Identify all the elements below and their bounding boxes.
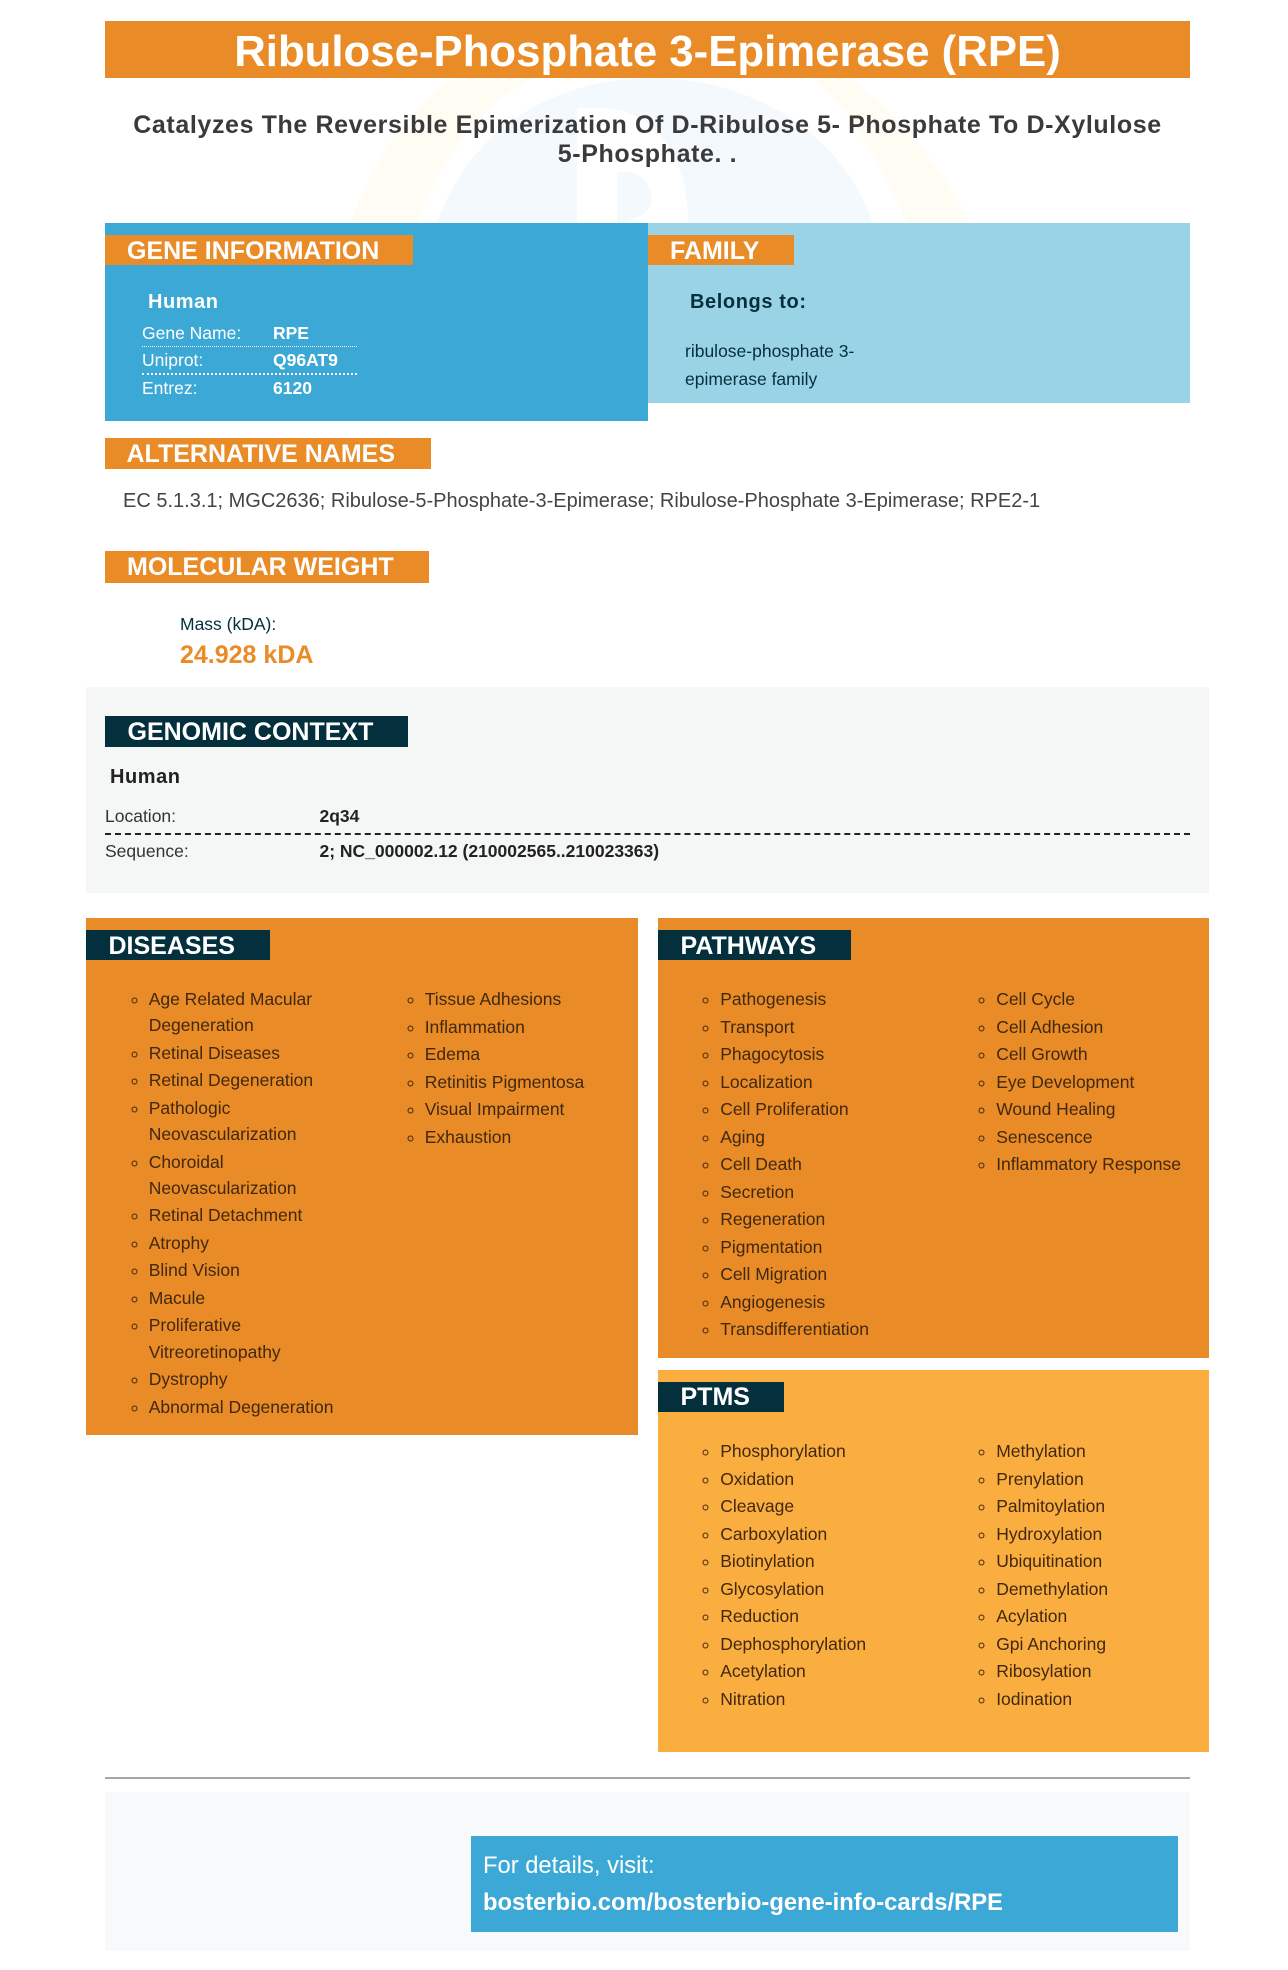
ptms list column 2: Iodination bbox=[996, 1688, 1072, 1708]
gene name row bbox=[142, 320, 357, 346]
entrez row bbox=[142, 378, 312, 398]
entrez row: 6120 bbox=[273, 378, 312, 398]
pathways list column 1 bbox=[702, 989, 869, 1339]
heading: alternative names: ALTERNATIVE NAMES bbox=[126, 440, 395, 468]
ptms list column 1: Oxidation bbox=[720, 1468, 794, 1488]
diseases list column 2: Inflammation bbox=[425, 1016, 525, 1036]
divider bbox=[105, 832, 1190, 834]
ptms list column 2 bbox=[978, 1441, 1108, 1708]
entrez row: Entrez: bbox=[142, 378, 197, 398]
heading: gene information: GENE INFORMATION bbox=[127, 237, 379, 265]
title banner: Ribulose-Phosphate 3-Epimerase (RPE) bbox=[234, 27, 1061, 76]
ptms list column 1: Carboxylation bbox=[720, 1524, 827, 1544]
species label: Human bbox=[110, 766, 181, 788]
pathways list column 1: Regeneration bbox=[720, 1209, 825, 1229]
diseases list column 1: Macule bbox=[149, 1288, 205, 1308]
ptms list column 1: Reduction bbox=[720, 1606, 799, 1626]
diseases list column 1: Choroidal Neovascularization bbox=[149, 1152, 297, 1198]
diseases list column 1: Pathologic Neovascularization bbox=[149, 1098, 297, 1144]
gene name row: RPE bbox=[273, 322, 309, 342]
diseases list column 1: Retinal Degeneration bbox=[149, 1070, 313, 1090]
diseases list column 1: Dystrophy bbox=[149, 1369, 227, 1389]
pathways list column 2: Eye Development bbox=[996, 1072, 1134, 1092]
panel: gene information bbox=[105, 223, 648, 421]
pathways list column 2 bbox=[978, 989, 1181, 1174]
pathways list column 1: Cell Proliferation bbox=[720, 1099, 849, 1119]
diseases list column 1: Retinal Detachment bbox=[149, 1205, 302, 1225]
family text bbox=[685, 341, 854, 389]
panel: ptms bbox=[658, 1370, 1209, 1752]
details url: bosterbio.com/bosterbio-gene-info-cards/RPE bbox=[483, 1889, 1003, 1916]
ptms list column 1: Nitration bbox=[720, 1688, 785, 1708]
heading: pathways: PATHWAYS bbox=[680, 932, 816, 960]
pathways list column 2: Inflammatory Response bbox=[996, 1154, 1181, 1174]
heading: molecular weight: MOLECULAR WEIGHT bbox=[127, 553, 394, 581]
gene name row: Gene Name: bbox=[142, 322, 241, 342]
sequence row: Sequence: bbox=[105, 841, 189, 861]
pathways list column 1: Secretion bbox=[720, 1182, 794, 1202]
ptms list column 2: Methylation bbox=[996, 1441, 1086, 1461]
pathways list column 1: Aging bbox=[720, 1126, 765, 1146]
mass value: 24.928 kDA bbox=[180, 641, 313, 669]
heading: family bbox=[648, 235, 794, 265]
ptms list column 2: Ribosylation bbox=[996, 1661, 1092, 1681]
pathways list column 1: Transdifferentiation bbox=[720, 1319, 869, 1339]
diseases list column 2: Visual Impairment bbox=[425, 1099, 564, 1119]
location row: 2q34 bbox=[320, 806, 359, 826]
diseases list column 2: Tissue Adhesions bbox=[425, 989, 561, 1009]
sequence row bbox=[105, 841, 659, 861]
ptms list column 1: Dephosphorylation bbox=[720, 1634, 866, 1654]
diseases list column 1: Retinal Diseases bbox=[149, 1043, 280, 1063]
location row bbox=[105, 806, 360, 826]
species label: Human bbox=[148, 290, 219, 312]
pathways list column 1: Cell Migration bbox=[720, 1264, 827, 1284]
ptms list column 1: Glycosylation bbox=[720, 1578, 824, 1598]
pathways list column 2: Wound Healing bbox=[996, 1099, 1116, 1119]
belongs to label: Belongs to: bbox=[690, 291, 807, 313]
panel: family bbox=[648, 223, 1190, 403]
sequence row: 2; NC_000002.12 (210002565..210023363) bbox=[320, 841, 659, 861]
pathways list column 1: Phagocytosis bbox=[720, 1044, 824, 1064]
ptms list column 1: Biotinylation bbox=[720, 1551, 815, 1571]
alternative names text: EC 5.1.3.1; MGC2636; Ribulose-5-Phosphate-3-Epimerase; Ribulose-Phosphate 3-Epimerase; RPE2-1 bbox=[123, 490, 1040, 512]
ptms list column 2: Acylation bbox=[996, 1606, 1067, 1626]
diseases list column 1: Atrophy bbox=[149, 1233, 209, 1253]
heading: ptms bbox=[658, 1382, 784, 1412]
panel: footer bbox=[105, 1792, 1190, 1951]
uniprot row: Q96AT9 bbox=[273, 350, 338, 370]
heading: diseases: DISEASES bbox=[108, 932, 235, 960]
panel: pathways bbox=[658, 918, 1209, 1358]
pathways list column 1: Pigmentation bbox=[720, 1236, 822, 1256]
pathways list column 1: Cell Death bbox=[720, 1154, 802, 1174]
ptms list column 2: Gpi Anchoring bbox=[996, 1634, 1106, 1654]
diseases list column 2: Exhaustion bbox=[425, 1126, 511, 1146]
pathways list column 1: Pathogenesis bbox=[720, 989, 826, 1009]
ptms list column 2: Hydroxylation bbox=[996, 1524, 1102, 1544]
panel: genomic context bbox=[86, 687, 1209, 893]
details label: For details, visit: bbox=[483, 1852, 655, 1879]
ptms list column 1 bbox=[702, 1441, 866, 1708]
heading: diseases bbox=[86, 930, 270, 960]
mass label: Mass (kDA): bbox=[180, 614, 276, 634]
diseases list column 1: Proliferative Vitreoretinopathy bbox=[149, 1315, 281, 1362]
diseases list column 2 bbox=[408, 989, 584, 1146]
pathways list column 2: Senescence bbox=[996, 1126, 1093, 1146]
subtitle: Catalyzes The Reversible Epimerization Of D-Ribulose 5- Phosphate To D-Xylulose bbox=[133, 110, 1162, 138]
pathways list column 1: Angiogenesis bbox=[720, 1292, 825, 1312]
ptms list column 2: Demethylation bbox=[996, 1578, 1108, 1598]
pathways list column 1: Transport bbox=[720, 1016, 794, 1036]
watermark logo bbox=[350, 78, 970, 223]
uniprot row: Uniprot: bbox=[142, 350, 203, 370]
panel: diseases bbox=[86, 918, 638, 1435]
ptms list column 2: Ubiquitination bbox=[996, 1551, 1102, 1571]
location row: Location: bbox=[105, 806, 176, 826]
uniprot row bbox=[142, 347, 357, 375]
diseases list column 1: Blind Vision bbox=[149, 1260, 240, 1280]
heading: ptms: PTMS bbox=[680, 1383, 750, 1411]
pathways list column 2: Cell Growth bbox=[996, 1044, 1088, 1064]
heading: pathways bbox=[658, 930, 851, 960]
diseases list column 1: Age Related Macular Degeneration bbox=[149, 989, 312, 1035]
ptms list column 2: Prenylation bbox=[996, 1468, 1084, 1488]
heading: genomic context: GENOMIC CONTEXT bbox=[128, 718, 373, 746]
diseases list column 1: Abnormal Degeneration bbox=[149, 1396, 334, 1416]
title banner bbox=[105, 21, 1190, 78]
pathways list column 2: Cell Adhesion bbox=[996, 1016, 1103, 1036]
ptms list column 1: Phosphorylation bbox=[720, 1441, 846, 1461]
subtitle: 5-Phosphate. . bbox=[558, 140, 737, 168]
family text: ribulose-phosphate 3- bbox=[685, 341, 854, 361]
diseases list column 1 bbox=[132, 989, 334, 1416]
diseases list column 2: Retinitis Pigmentosa bbox=[425, 1072, 584, 1092]
pathways list column 2: Cell Cycle bbox=[996, 989, 1075, 1009]
callout: details link bbox=[471, 1836, 1178, 1932]
heading: family: FAMILY bbox=[670, 237, 759, 265]
subtitle bbox=[133, 110, 1162, 168]
ptms list column 1: Cleavage bbox=[720, 1496, 794, 1516]
family text: epimerase family bbox=[685, 369, 817, 389]
ptms list column 1: Acetylation bbox=[720, 1661, 806, 1681]
pathways list column 1: Localization bbox=[720, 1072, 813, 1092]
ptms list column 2: Palmitoylation bbox=[996, 1496, 1105, 1516]
diseases list column 2: Edema bbox=[425, 1044, 480, 1064]
